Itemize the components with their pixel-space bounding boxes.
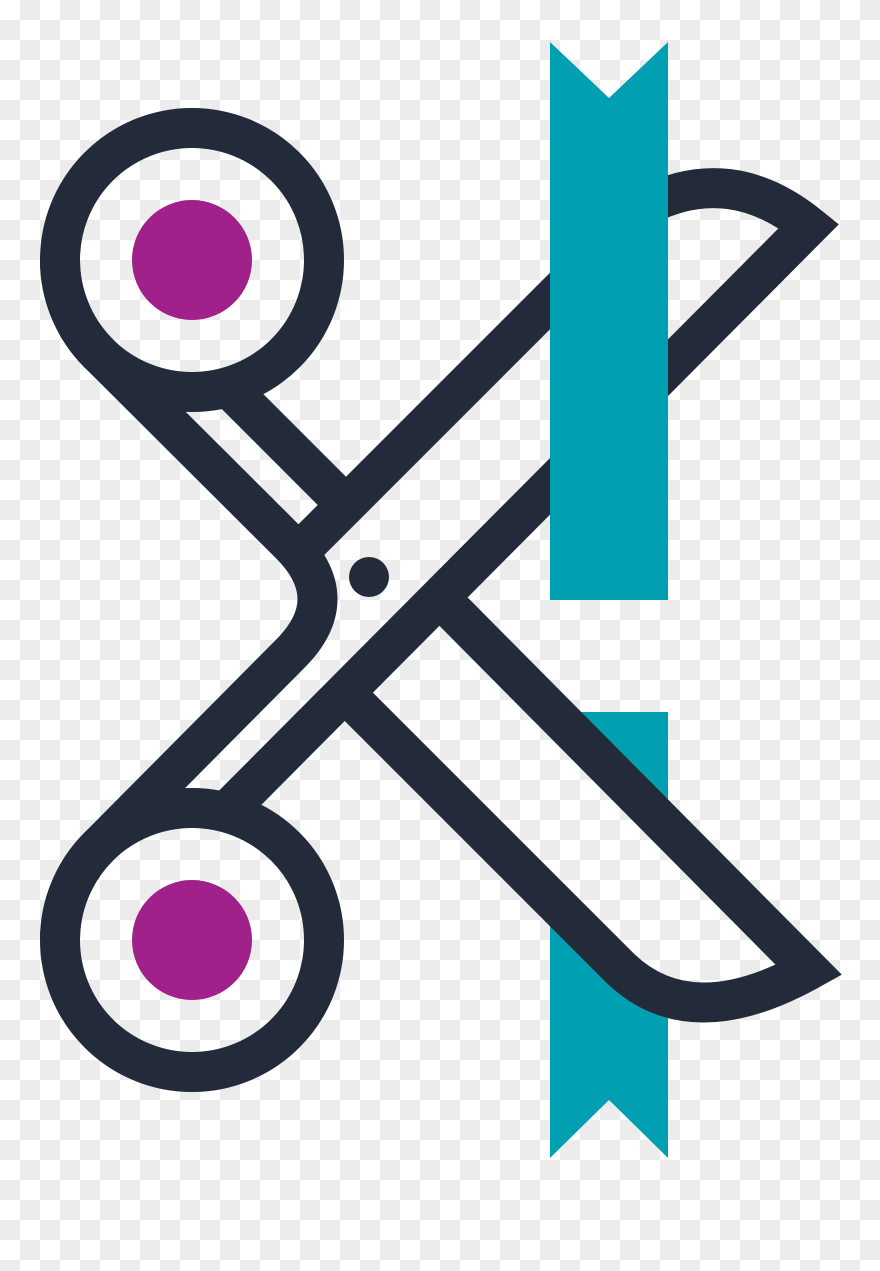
scissors outline strokes	[60, 188, 809, 1003]
handle: outer contour	[60, 260, 318, 940]
handle ring: top	[60, 128, 324, 392]
handle ring: bottom	[60, 808, 324, 1072]
ribbon: top piece	[550, 42, 668, 600]
blade: lower blade body (opaque)	[345, 598, 809, 1003]
blade: lower blade	[345, 598, 809, 1003]
blade: upper blade	[225, 188, 809, 813]
handle: upper inner line	[225, 384, 346, 505]
pivot dot	[349, 557, 389, 597]
ribbon: bottom piece	[550, 712, 668, 1158]
